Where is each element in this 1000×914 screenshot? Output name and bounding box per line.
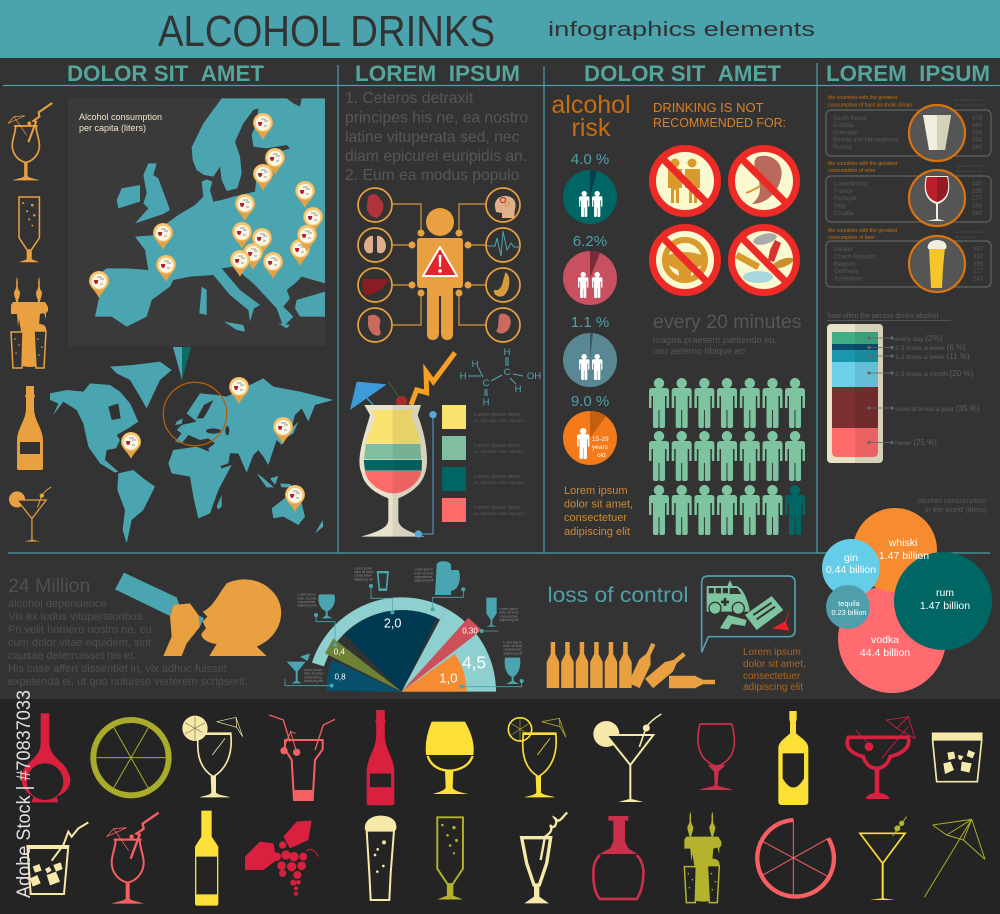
panel: hard alcohol ranking: 478 (972, 116, 983, 122)
text: every 20 minutes: magna praesent partiendo eu, (653, 335, 777, 345)
panel: hard alcohol ranking: consumption of hard alcoholic drinks (828, 102, 912, 108)
small captions: adipiscing elit (414, 579, 433, 583)
small captions: Lorem ipsum (304, 668, 323, 672)
section headings (67, 61, 990, 86)
text: orange accident note: adipiscing elit (743, 682, 803, 693)
chart: bubbles of spirits: 1.47 billion (920, 600, 970, 612)
text: world consumption caption: in the world (liters) (925, 505, 987, 514)
panel: beer ranking: 347 (973, 247, 984, 253)
ethanol formula: OH (527, 371, 541, 382)
panel: left orange drink icons (8, 103, 52, 542)
small captions: Lorem ipsum (503, 640, 522, 644)
risk 9.0 (563, 393, 617, 465)
icon: kidney (368, 315, 381, 336)
text block: numbered paragraph: 2. Eum ea modus populo (345, 167, 520, 184)
panel: beer ranking: consumption of beer (828, 235, 875, 241)
small captions: dolor sit amet, (414, 571, 434, 575)
panel: wine ranking: 340 (972, 182, 983, 188)
panel: wine ranking: consumption of wine (828, 168, 875, 174)
panel: beer ranking: 243 (973, 276, 984, 282)
icon: champagne bottle (17, 386, 43, 470)
icon: stomach (495, 274, 508, 296)
panel: hard alcohol ranking: Russia (833, 145, 852, 151)
chart: bubbles of spirits: rum (936, 587, 954, 599)
icon: yellow whisky bottle (778, 711, 808, 805)
panel: beer ranking: person in a year (955, 235, 977, 239)
ethanol formula: H (483, 397, 490, 408)
icon: flute (19, 197, 39, 262)
small captions: consectetuer (414, 575, 432, 579)
small captions: adipiscing elit (499, 618, 518, 622)
icon: red champagne bottle (367, 710, 394, 805)
heading: risk (572, 114, 611, 142)
icon: ambulance (707, 580, 749, 614)
icon: pint of beer (365, 816, 396, 900)
small captions: adipiscing elit (304, 679, 323, 683)
chart: bubbles of spirits: tequila (838, 599, 861, 608)
text: 24 million: causae deterruisset his et. (8, 650, 136, 662)
icon: olive flute (437, 817, 463, 899)
icon: cream champagne flute with spiral straw (522, 813, 567, 903)
risk 6.2 (563, 233, 617, 305)
icon: no children (652, 148, 718, 214)
panel: hard alcohol ranking: 344 (972, 145, 983, 151)
legend text (474, 412, 525, 516)
panel: hard alcohol ranking: shot glasses of 50 ml (954, 98, 983, 102)
panel: wine ranking: glasses of 200 ml on (956, 164, 984, 168)
section headings: DOLOR SIT AMET (584, 61, 781, 86)
chart: layered cocktail (350, 353, 525, 538)
gauge values: 2,0 (384, 617, 401, 631)
text: every 20 minutes (653, 311, 802, 356)
panel: beer ranking: Azerbaijan (834, 276, 862, 282)
icon: person drinking from bottle (115, 573, 281, 656)
legend text: Lorem ipsum dolor (474, 412, 520, 418)
risk 4.0: 4.0 % (571, 151, 609, 168)
panel: hard alcohol ranking: 460 (972, 123, 983, 129)
icon: tall glass with cherries (269, 715, 335, 800)
heading: drinking not recommended: RECOMMENDED FOR: (653, 115, 786, 130)
labels: 2-3 times a week (6 %) (895, 343, 966, 352)
icon: yellow snifter (426, 722, 474, 794)
small captions: dolor sit amet, (499, 611, 519, 615)
panel: beer ranking: Chech Republic (834, 254, 876, 260)
text block: numbered paragraph: latine vituperata sed, nec (345, 129, 520, 146)
legend text: eu cum dolor vitae equidem (474, 480, 525, 485)
panel: wine ranking: the person in a year (956, 169, 983, 173)
labels (895, 334, 980, 447)
panel: wine ranking: Italy (834, 204, 845, 210)
panel: Europe map (68, 98, 325, 346)
text block: numbered paragraph: 1. Ceteros detraxit (345, 90, 474, 107)
risk 9.0: old (597, 452, 606, 459)
icon: cocktail umbrella (924, 819, 985, 897)
icon: shot glass (923, 115, 951, 150)
text block: numbered paragraph: principes his ne, ea nostro (345, 110, 528, 126)
text: world consumption caption (918, 496, 987, 514)
ethanol formula: C (483, 378, 490, 389)
icon: lungs (364, 236, 386, 253)
panel: wine ranking: France (834, 189, 853, 195)
panel: wine ranking: Portugal (834, 196, 856, 202)
ethanol formula: H (515, 384, 522, 395)
small captions (297, 566, 523, 683)
panel: Europe map: per capita (liters) (79, 123, 146, 133)
chart: bubbles of spirits (822, 508, 992, 693)
chart: bubbles of spirits: gin (844, 552, 858, 564)
icon: salmon tulip cocktail (107, 813, 159, 904)
text: 24 million: cum dolor vitae equidem, sint (8, 637, 151, 649)
heading (551, 91, 631, 142)
text: orange note: adipiscing elit (564, 526, 630, 538)
icon: pistol (720, 615, 747, 629)
panel: beer ranking: 285 (973, 262, 984, 268)
legend text: Lorem ipsum dolor (474, 474, 520, 480)
icon: pulse (487, 231, 520, 256)
icon: grapes (245, 821, 318, 896)
icon: heart (367, 194, 383, 218)
panel: hard alcohol ranking: the countries with the greatest (828, 95, 898, 101)
panel: body organs diagram (358, 188, 520, 342)
stock photo credit: Adobe Stock | #70837033 (14, 690, 35, 898)
icon: beer tap (11, 277, 48, 368)
panel: wine ranking: Luxembourg (834, 182, 867, 188)
text: 24 million: His case affert dissentiet in, vix adhuc fuisset (8, 663, 227, 675)
text: orange note: dolor sit amet, (564, 498, 633, 510)
icon: yellow martini with olives (860, 817, 907, 900)
icon: lime wheel (93, 720, 169, 795)
panel: beer ranking: Germany (834, 269, 859, 275)
text: every 20 minutes: usu aeterno tibique ao (653, 346, 745, 356)
small captions: adipiscing elit (297, 604, 316, 608)
labels: several times a year (35 %) (895, 404, 980, 413)
ethanol formula: H (472, 359, 479, 370)
map caption: Alcohol consumption (79, 112, 162, 122)
text: orange note: consectetuer (564, 512, 627, 524)
small captions: Lorem ipsum (297, 593, 316, 597)
connectors (285, 586, 522, 687)
small glass icons (287, 561, 520, 684)
panel: hard alcohol ranking (826, 95, 991, 161)
panel: wine ranking: 242 (972, 211, 983, 217)
text: world consumption caption: alcohol consumption (918, 496, 986, 505)
text: 24 million: alcohol dependence (8, 598, 106, 610)
legend text: eu cum dolor vitae equidem (474, 418, 525, 423)
gauge values: 0,4 (334, 647, 345, 656)
small captions: adipiscing elit (503, 651, 522, 655)
icon: martini (9, 487, 51, 542)
section headings: LOREM IPSUM (355, 61, 520, 86)
risk 1.1 (563, 314, 617, 387)
panel: beer ranking: 277 (973, 269, 984, 275)
icon: pointer from map to world (173, 347, 191, 380)
icon: crashed car (745, 596, 791, 631)
icon: lowball with ice (27, 822, 88, 894)
glass (827, 324, 883, 463)
chart: half-gauge of drink volume (285, 561, 524, 692)
icon: olive beer tap (684, 812, 721, 903)
risk 1.1: 1.1 % (571, 314, 609, 331)
icon: cream martini with lime (593, 714, 661, 802)
icon: wine glass with lime (182, 716, 243, 797)
ethanol formula: H (504, 347, 511, 358)
panel: wine ranking: Croatia (834, 211, 854, 217)
human figure (417, 208, 463, 340)
icon: fetus (496, 314, 511, 333)
icon: red wine glass (698, 724, 734, 790)
title: ALCOHOL DRINKS (158, 7, 495, 56)
panel: wine ranking: 266 (972, 204, 983, 210)
panel: hard alcohol ranking: on the person in a year (954, 103, 985, 107)
chart: bubbles of spirits: 44.4 billion (860, 647, 910, 659)
ethanol formula (460, 347, 541, 408)
ethanol formula: C (504, 367, 511, 378)
legend text: Lorem ipsum dolor (474, 443, 520, 449)
icon: margarita (847, 717, 915, 799)
world pins (121, 377, 305, 512)
highlight circle (163, 382, 227, 446)
small captions: dolor sit amet, (297, 596, 317, 600)
icon: yellow bottle (195, 811, 218, 906)
gauge values: 0,8 (334, 672, 346, 681)
text: 24 million: expetenda ei, ut quo noluisse verterem scripserit. (8, 676, 248, 688)
icon: cocktail (8, 103, 52, 180)
gauge values: 4,5 (462, 652, 486, 672)
text block: numbered paragraph (345, 90, 528, 184)
text: 24 million (8, 575, 248, 688)
icon: whisky glass with ice (933, 733, 982, 782)
legend text: Lorem ipsum dolor (474, 505, 520, 511)
panel: beer ranking: mugs of 500 ml on the (955, 230, 985, 234)
heading: loss of control: loss of control (548, 583, 688, 607)
panel: hard alcohol ranking: Estonia (833, 123, 854, 129)
icon: no medication (732, 228, 796, 292)
panel: beer ranking: Ireland (834, 247, 852, 253)
panel: alcohol risk (551, 91, 633, 538)
panel: wine ranking: 339 (972, 189, 983, 195)
small captions: Lorem ipsum (499, 607, 518, 611)
risk 4.0 (563, 151, 617, 224)
risk 9.0: years (592, 444, 609, 451)
icon: liver (362, 279, 389, 295)
text: 24 million: 24 Million (8, 575, 90, 597)
panel: beer ranking: the countries with the greatest (828, 228, 898, 234)
gauge segments (312, 597, 496, 692)
row of falling bottles (547, 641, 715, 688)
straw (411, 353, 455, 405)
panel: beer ranking: 320 (973, 254, 984, 260)
text: 24 million: Pri velit homero nostro ne, eu (8, 624, 152, 636)
text: every 20 minutes: every 20 minutes (653, 311, 802, 333)
risk 9.0: 15-29 (592, 436, 609, 443)
small captions: dolor sit amet, (503, 644, 523, 648)
labels: never (25 %) (895, 438, 937, 447)
panel: wine ranking (826, 161, 991, 226)
text: orange note (564, 485, 633, 538)
icon: red round decanter (593, 816, 643, 899)
panel: hard alcohol ranking: Grenadal (833, 130, 858, 136)
panel: hard alcohol ranking: 354 (972, 138, 983, 144)
section headings: LOREM IPSUM (826, 61, 990, 86)
panel: beer ranking (826, 228, 991, 292)
small captions: consectetuer (354, 574, 372, 578)
small captions: Lorem ipsum (414, 568, 433, 572)
section headings: DOLOR SIT AMET (67, 61, 264, 86)
chart: bubbles of spirits: 0.44 billion (826, 564, 876, 576)
connector (418, 415, 433, 534)
heading: how often the person drinks alcohol (828, 313, 939, 320)
chart: bubbles of spirits: vodka (871, 634, 899, 646)
panel: hard alcohol ranking: 358 (972, 130, 983, 136)
heading: drinking not recommended: DRINKING IS NOT (653, 100, 764, 115)
small captions: Lorem ipsum (354, 566, 373, 570)
small captions: consectetuer (499, 614, 517, 618)
map pins (89, 113, 323, 298)
text: 24 million: Vis ex ludus vituperatoribus. (8, 611, 145, 623)
icon: red round bottle (22, 713, 70, 802)
panel: wine ranking: the countries with the greatest (828, 161, 898, 167)
panel: hard alcohol ranking: Bosnia and Herzegovina (833, 138, 899, 144)
small captions: dolor sit amet, (304, 672, 324, 676)
icon: umbrella (350, 382, 387, 410)
icon: brain head (495, 196, 516, 218)
labels: 2-3 times a month (20 %) (895, 369, 974, 378)
gauge values (334, 617, 486, 685)
ethanol formula: H (460, 371, 467, 382)
text: orange accident note: consectetuer (743, 671, 801, 682)
text: orange accident note (743, 647, 806, 693)
people grid (649, 378, 805, 535)
small captions: adipiscing elit (354, 577, 373, 581)
risk 9.0: 9.0 % (571, 393, 609, 410)
heading: drinking not recommended (653, 100, 786, 130)
chart: how often the person drinks (827, 313, 980, 463)
icon: no driving (652, 228, 718, 292)
chart: bubbles of spirits: 0.23 billion (832, 608, 866, 617)
panel: beer ranking: Belgium (834, 262, 856, 268)
world map (50, 362, 333, 543)
icon: lime wedge (757, 820, 834, 897)
header band (0, 0, 1000, 58)
icon: wine glass (925, 176, 949, 221)
panel: wine ranking: 277 (972, 196, 983, 202)
text: orange accident note: Lorem ipsum (743, 647, 801, 658)
labels: every day (2%) (895, 334, 943, 343)
labels: 1-2 times a week (11 %) (895, 352, 970, 361)
legend text: eu cum dolor vitae equidem (474, 449, 525, 454)
risk 6.2: 6.2% (573, 233, 607, 250)
icon: beer glass (928, 240, 946, 288)
heading: alcohol (551, 91, 631, 119)
legend text: eu cum dolor vitae equidem (474, 511, 525, 516)
subtitle: infographics elements (548, 19, 815, 41)
legend squares (442, 405, 466, 429)
gauge values: 0,30 (462, 627, 478, 636)
layers (832, 332, 878, 344)
small captions: consectetuer (297, 600, 315, 604)
text: orange note: Lorem ipsum (564, 485, 628, 497)
small captions: consectetuer (503, 648, 521, 652)
small captions: dolor sit amet, (354, 570, 374, 574)
panel: hard alcohol ranking: South Korea (833, 116, 867, 122)
text block: numbered paragraph: diam epicurei euripidis an. (345, 148, 527, 165)
icon: warning triangle (423, 247, 457, 276)
text: orange accident note: dolor sit amet, (743, 659, 806, 670)
gauge values: 1,0 (439, 670, 458, 685)
icon: no pregnancy (732, 148, 796, 214)
panel: bottom icon band (0, 690, 1000, 914)
icon: yellow wine glass with lime (508, 718, 566, 797)
small captions: consectetuer (304, 675, 322, 679)
chart: bubbles of spirits: whiski (888, 537, 917, 549)
callout: accident speech bubble (702, 576, 795, 652)
glass (359, 405, 427, 537)
chart: bubbles of spirits: 1.47 billion (879, 550, 929, 562)
